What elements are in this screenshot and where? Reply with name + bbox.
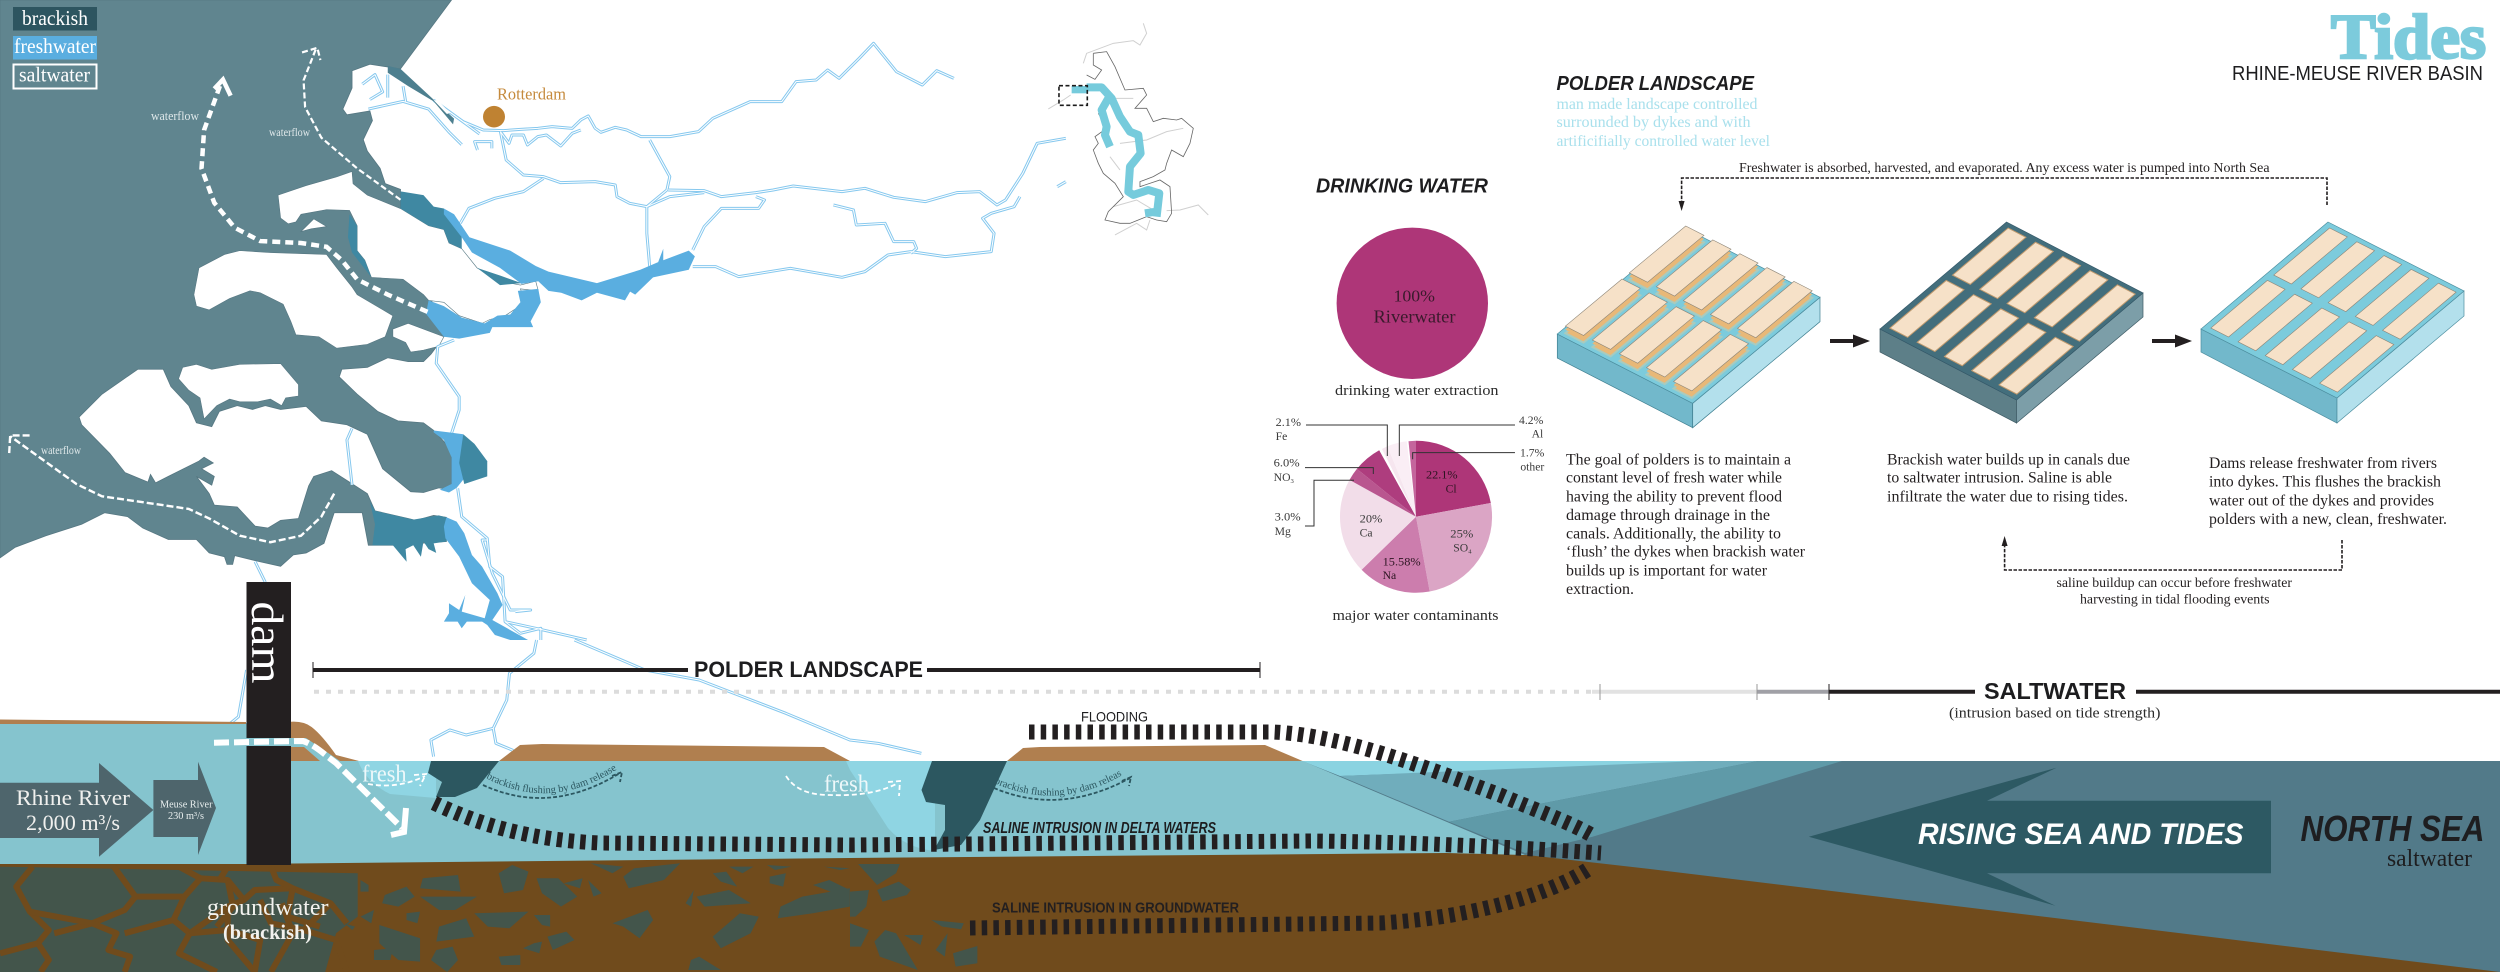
text: dams release: Dams release freshwater from rivers [2209, 455, 2437, 472]
pie leader lines and labels: Fe [1276, 430, 1287, 443]
locator map of the Rhine-Meuse basin [1048, 23, 1208, 235]
fresh water pockets [358, 761, 935, 851]
pie leader lines and labels: Na [1383, 569, 1397, 582]
waterflow arrow 1 [202, 80, 428, 312]
brackish plumes [428, 761, 1007, 850]
text: goal of polders [1566, 451, 1806, 598]
map: river network [0, 0, 1066, 760]
pie leader lines and labels: 25% [1450, 528, 1474, 541]
polder description [1556, 96, 1771, 150]
scale bar: dotted extent [314, 690, 1592, 694]
North Sea label: saltwater [2387, 846, 2472, 872]
cross section: background water [0, 720, 2500, 972]
text: goal of polders: canals. Additionally, the ability to [1566, 525, 1781, 542]
fresh label and arrow, right [786, 772, 900, 798]
pie leader lines and labels: 15.58% [1383, 555, 1421, 568]
scale bar: saltwater: SALTWATER [1984, 678, 2126, 704]
legend [13, 6, 97, 88]
text: goal of polders: The goal of polders is to maintain a [1566, 451, 1791, 468]
waterflow arrow 3 [9, 435, 334, 542]
diagram: polder with fresh canals [2201, 222, 2464, 423]
text: goal of polders: constant level of fresh water while [1566, 470, 1782, 487]
arrow: step two to three [2152, 334, 2192, 348]
pie: drinking water extraction [1337, 228, 1488, 379]
waterflow labels: waterflow [151, 108, 200, 123]
arrow: Rhine River [0, 763, 153, 857]
panel: drinking water [1274, 176, 1545, 624]
polder description: artificifially controlled water level [1556, 133, 1771, 150]
pie leader lines and labels: 4 [1468, 549, 1472, 556]
lower process note: harvesting in tidal flooding events [2080, 591, 2270, 606]
groundwater stones [0, 863, 850, 972]
heading: drinking water: DRINKING WATER [1316, 176, 1489, 198]
pie leader lines and labels: Al [1532, 428, 1543, 441]
text: goal of polders: builds up is important for water [1566, 562, 1768, 579]
lower process note [2056, 575, 2293, 606]
saltwater note: (intrusion based on tide strength) [1949, 706, 2161, 722]
waterflow labels [41, 108, 310, 457]
arrow: step one to two [1830, 334, 1870, 348]
flooding indicator [1029, 708, 1595, 837]
levees [291, 722, 1303, 761]
subtitle: RHINE-MEUSE RIVER BASIN [2232, 63, 2483, 85]
estuaries [348, 66, 695, 640]
text: dams release [2209, 455, 2447, 528]
pie leader lines and labels: NO [1274, 471, 1291, 484]
arrow: dam release flow [214, 741, 406, 835]
upstream bank [0, 720, 246, 724]
arrow: rising sea and tides [1809, 768, 2271, 906]
dam [242, 582, 293, 865]
pie: major water contaminants [1340, 441, 1492, 593]
panel: polder landscape [1556, 73, 2464, 606]
rivers: inner line [230, 43, 1066, 760]
polder description: man made landscape controlled [1556, 96, 1758, 113]
polder description: surrounded by dykes and with [1556, 114, 1750, 131]
legend: freshwater: freshwater [14, 34, 96, 58]
saline intrusion in groundwater [970, 868, 1590, 928]
text: brackish build up: Brackish water builds up in canals due [1887, 451, 2130, 468]
pie leader lines and labels: 20% [1360, 513, 1383, 526]
diagram: polder with brackish canals [1880, 222, 2143, 423]
groundwater stones, east part [850, 864, 977, 970]
pie leader lines and labels: Mg [1275, 525, 1291, 538]
land islands [179, 171, 538, 419]
text: goal of polders: ‘flush’ the dykes when brackish water [1566, 544, 1806, 561]
flooding indicator: FLOODING [1081, 708, 1148, 724]
saline intrusion in groundwater: SALINE INTRUSION IN GROUNDWATER [992, 900, 1239, 916]
pie leader lines and labels: SO [1453, 542, 1468, 555]
pie leader lines and labels: 1.7% [1520, 447, 1545, 460]
top process note: Freshwater is absorbed, harvested, and evaporated. Any excess water is pumped into North Sea [1739, 161, 2270, 176]
text: brackish build up: infiltrate the water due to rising tides. [1887, 488, 2128, 505]
text: goal of polders: damage through drainage in the [1566, 507, 1770, 524]
diagram: polder with raised fields [1557, 226, 1820, 428]
groundwater label [207, 895, 328, 944]
pie leader lines and labels: Cl [1446, 482, 1457, 495]
North Sea label [2300, 808, 2484, 872]
upstream water [0, 723, 250, 866]
groundwater label: groundwater [207, 895, 328, 921]
waterflow labels: waterflow [269, 125, 310, 139]
pie leader lines and labels: 2.1% [1276, 416, 1301, 429]
groundwater label: (brackish) [223, 920, 312, 944]
brackish flushing label, left: brackish flushing by dam release [486, 766, 616, 795]
brackish flushing label, right: brackish flushing by dam release [996, 771, 1122, 798]
text: goal of polders: having the ability to prevent flood [1566, 488, 1782, 505]
pie leader lines and labels: other [1520, 461, 1544, 474]
pie leader lines and labels: Ca [1360, 527, 1373, 540]
scale bar: saltwater [1592, 678, 2500, 722]
arrow: lower dashed loop [2002, 536, 2342, 570]
pie leader lines and labels: 3.0% [1275, 511, 1301, 524]
pie leader lines and labels: 6.0% [1274, 457, 1300, 470]
tidal wedge layers [1302, 761, 1842, 853]
pie: drinking water extraction: Riverwater [1374, 306, 1456, 326]
rivers: outer line [230, 43, 1066, 760]
lower process note: saline buildup can occur before freshwater [2056, 575, 2293, 590]
text: dams release: water out of the dykes and provides [2209, 492, 2434, 509]
caption: drinking water extraction: drinking water extraction [1335, 383, 1499, 399]
ground [0, 853, 2500, 972]
arrow: Rhine River: Rhine River [16, 785, 131, 810]
fresh label and arrow, left: fresh [362, 762, 406, 788]
arrow: Meuse River: 230 m³/s [168, 811, 204, 822]
pie: drinking water extraction: 100% [1394, 286, 1435, 306]
text: brackish build up [1887, 451, 2130, 505]
pie leader lines and labels: 3 [1291, 478, 1295, 485]
Rotterdam marker: Rotterdam [497, 84, 566, 104]
arrow: Meuse River: Meuse River [160, 798, 213, 810]
river water [291, 761, 1525, 866]
caption: major water contaminants: major water contaminants [1332, 608, 1499, 624]
arrow: top dashed loop [1679, 178, 2327, 211]
scale bar: polder landscape [313, 657, 1260, 682]
arrow: rising sea and tides: RISING SEA AND TIDES [1918, 818, 2244, 851]
pie leader lines and labels: 4.2% [1519, 414, 1544, 427]
text: brackish build up: to saltwater intrusion. Saline is able [1887, 470, 2112, 487]
saltwater sea and delta [0, 0, 538, 566]
north sea water [1300, 761, 2500, 972]
text: dams release: polders with a new, clean, freshwater. [2209, 511, 2447, 528]
arrow: Rhine River: 2,000 m³/s [26, 810, 120, 835]
waterflow labels: waterflow [41, 443, 81, 457]
dam: dam [242, 602, 293, 684]
legend: saltwater: saltwater [19, 62, 90, 86]
waterflow arrow 2 [302, 48, 401, 200]
text: goal of polders: extraction. [1566, 581, 1634, 598]
text: dams release: into dykes. This flushes the brackish [2209, 474, 2441, 491]
scale bar: polder landscape: POLDER LANDSCAPE [694, 657, 923, 682]
title [2232, 2, 2486, 85]
title: Tides [2331, 2, 2486, 72]
saline intrusion in delta waters: SALINE INTRUSION IN DELTA WATERS [983, 820, 1217, 837]
fresh water spill over levee [291, 738, 340, 761]
arrow: Meuse River [153, 762, 216, 855]
brackish flushing label, right [994, 771, 1132, 801]
fresh label and arrow, right: fresh [824, 772, 869, 798]
legend: brackish: brackish [22, 6, 88, 30]
pie leader lines and labels: 22.1% [1426, 468, 1458, 481]
heading: polder landscape: POLDER LANDSCAPE [1556, 73, 1755, 95]
Rotterdam marker [483, 84, 566, 127]
pie leader lines and labels [1274, 414, 1545, 582]
saline intrusion in delta waters [434, 803, 1601, 853]
